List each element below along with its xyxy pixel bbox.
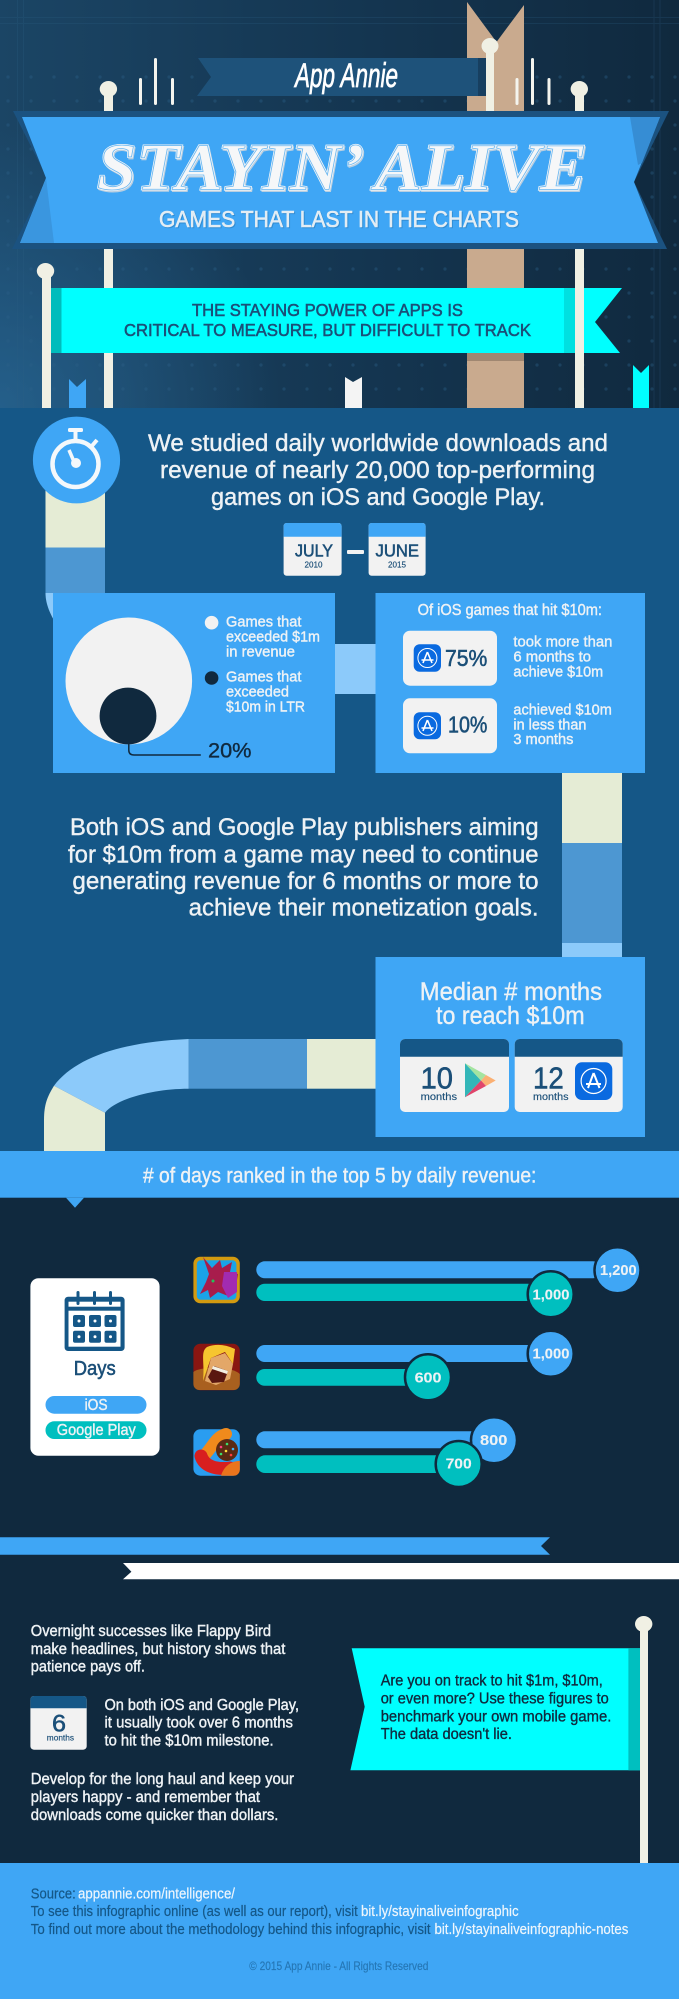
stat: 10%: in less than <box>513 716 586 733</box>
small ribbon markers <box>69 365 649 408</box>
bars: game 3 <box>256 1417 517 1487</box>
intro text: revenue of nearly 20,000 top-performing <box>160 457 595 484</box>
sources: bit.ly/stayinaliveinfographic <box>361 1903 519 1920</box>
icon: calendar <box>65 1291 125 1351</box>
icon: 6 months calendar: months <box>47 1733 74 1743</box>
legend card: days: Google Play <box>57 1422 136 1439</box>
subtitle: GAMES THAT LAST IN THE CHARTS <box>159 206 519 232</box>
takeaway text: downloads come quicker than dollars. <box>31 1807 278 1824</box>
stat: 75%: took more than <box>513 634 612 651</box>
left pole behind banners <box>100 81 117 408</box>
call-to-action flag <box>350 1648 640 1770</box>
takeaway text: Overnight successes like Flappy Bird <box>31 1623 271 1640</box>
takeaway text: Develop for the long haul and keep your <box>31 1771 294 1788</box>
stat: 75%: achieve $10m <box>513 664 603 681</box>
game icon: candy <box>193 1429 240 1476</box>
intro text: games on iOS and Google Play. <box>211 484 545 511</box>
title: STAYIN’ ALIVE <box>97 130 587 204</box>
subtitle: GAMES THAT LAST IN THE CHARTS <box>160 207 520 233</box>
takeaway text: to hit the $10m milestone. <box>104 1733 274 1750</box>
legend: $10m in LTR <box>226 699 305 716</box>
flag pole <box>37 263 54 408</box>
legend <box>205 614 320 716</box>
date range calendars: JULY <box>295 541 333 561</box>
title: STAYIN’ ALIVE <box>97 130 587 204</box>
divider ribbon: white <box>123 1563 679 1579</box>
legend card: days: Days <box>74 1358 116 1380</box>
call-to-action flag: Are you on track to hit $1m, $10m, <box>381 1673 603 1690</box>
title: STAYIN’ ALIVE <box>98 132 588 206</box>
bars: game 1: 1,200 <box>600 1262 637 1279</box>
bars: game 1 <box>256 1247 640 1317</box>
intro text: We studied daily worldwide downloads and <box>148 430 608 457</box>
legend: in revenue <box>226 644 295 660</box>
stat: 10%: 10% <box>448 712 487 738</box>
chart: nested circles <box>66 618 252 763</box>
stat: 10%: achieved $10m <box>513 701 612 718</box>
bars: game 3: 700 <box>446 1456 472 1473</box>
panel: revenue share <box>53 593 335 773</box>
call-to-action flag: The data doesn't lie. <box>381 1726 512 1743</box>
monetization text <box>68 814 539 922</box>
bars: game 2: 600 <box>415 1369 442 1386</box>
flag pole: call to action <box>635 1616 652 1863</box>
sources: appannie.com/intelligence/ <box>78 1885 236 1902</box>
monetization text: Both iOS and Google Play publishers aiming <box>70 814 539 841</box>
bars: game 3: 800 <box>480 1432 507 1449</box>
stat: 10% <box>403 698 612 753</box>
intro text <box>148 430 608 511</box>
takeaway text: On both iOS and Google Play, <box>104 1697 299 1714</box>
legend: Games that <box>226 669 302 686</box>
research section background <box>0 408 679 1151</box>
stat: 75%: 75% <box>445 645 487 671</box>
takeaway text: players happy - and remember that <box>31 1789 261 1806</box>
heading strip: days ranked: # of days ranked in the top 5 by daily revenue: <box>143 1164 536 1187</box>
tan vertical ribbon <box>467 2 524 408</box>
card: iOS 12 months: 12 <box>533 1060 564 1095</box>
copyright: © 2015 App Annie - All Rights Reserved <box>249 1959 428 1973</box>
icon: 6 months calendar <box>30 1696 87 1750</box>
right pole <box>571 81 588 408</box>
footer <box>0 1863 679 1999</box>
legend: exceeded <box>226 684 289 701</box>
bars: game 2 <box>256 1331 574 1400</box>
cyan flag headline: CRITICAL TO MEASURE, BUT DIFFICULT TO TRACK <box>124 320 531 340</box>
bar chart: days in top 5 <box>256 1247 640 1487</box>
takeaway text: it usually took over 6 months <box>104 1715 293 1732</box>
sources: To see this infographic online (as well as our report), visit <box>31 1903 359 1920</box>
header background <box>0 0 679 408</box>
panel: iOS games that hit $10m: Of iOS games that hit $10m: <box>418 602 602 619</box>
cyan flag headline: THE STAYING POWER OF APPS IS <box>192 300 463 320</box>
game icon: dragon <box>193 1257 240 1303</box>
App Annie logo ribbon: App Annie <box>294 57 398 95</box>
board game path <box>44 490 622 1151</box>
bars: game 2: 1,000 <box>532 1345 569 1362</box>
cyan flag headline <box>51 288 622 353</box>
main title ribbon <box>12 111 669 249</box>
chart: nested circles: 20% <box>208 740 252 763</box>
call-to-action flag: benchmark your own mobile game. <box>381 1708 611 1725</box>
panel: median months to reach $10m: to reach $10m <box>436 1002 585 1030</box>
legend: exceeded $1m <box>226 629 320 646</box>
heading strip: days ranked <box>0 1151 679 1208</box>
call-to-action flag: or even more? Use these figures to <box>381 1690 609 1707</box>
legend: Games that <box>226 614 302 631</box>
stat: 10%: 3 months <box>513 731 573 748</box>
date range calendars: 2015 <box>388 561 407 570</box>
monetization text: generating revenue for 6 months or more to <box>72 868 539 895</box>
App Annie logo ribbon <box>197 38 498 112</box>
card: iOS 12 months: months <box>533 1091 568 1103</box>
card: Google Play 10 months: months <box>421 1091 457 1103</box>
card: iOS 12 months <box>515 1039 623 1112</box>
sources: Source: <box>31 1885 76 1902</box>
legend card: days <box>30 1278 160 1456</box>
sources <box>31 1885 628 1938</box>
monetization text: achieve their monetization goals. <box>189 895 539 922</box>
bars: game 1: 1,000 <box>532 1286 569 1303</box>
panel: median months to reach $10m: Median # months <box>420 978 602 1006</box>
game icon: clash warrior <box>193 1344 240 1390</box>
sources: bit.ly/stayinaliveinfographic-notes <box>434 1921 628 1938</box>
divider ribbon: blue <box>0 1537 550 1555</box>
date range calendars <box>284 523 426 576</box>
panel: median months to reach $10m <box>376 957 645 1137</box>
takeaway text: make headlines, but history shows that <box>31 1641 286 1658</box>
ranking section background <box>0 1197 679 1863</box>
stat: 75% <box>403 631 612 686</box>
decorative tick lines <box>139 58 550 105</box>
takeaway text: patience pays off. <box>31 1659 145 1676</box>
date range calendars: JUNE <box>376 541 419 561</box>
icon: stopwatch <box>33 417 120 503</box>
monetization text: for $10m from a game may need to continue <box>68 841 539 868</box>
icon: 6 months calendar: 6 <box>52 1711 66 1738</box>
legend card: days: iOS <box>85 1397 108 1414</box>
date range calendars: 2010 <box>304 561 323 570</box>
panel: iOS games that hit $10m <box>376 593 645 773</box>
stat: 75%: 6 months to <box>513 649 591 666</box>
card: Google Play 10 months <box>400 1039 509 1112</box>
takeaway text <box>30 1623 299 1824</box>
sources: To find out more about the methodology behind this infographic, visit <box>31 1921 431 1938</box>
card: Google Play 10 months: 10 <box>421 1060 453 1095</box>
